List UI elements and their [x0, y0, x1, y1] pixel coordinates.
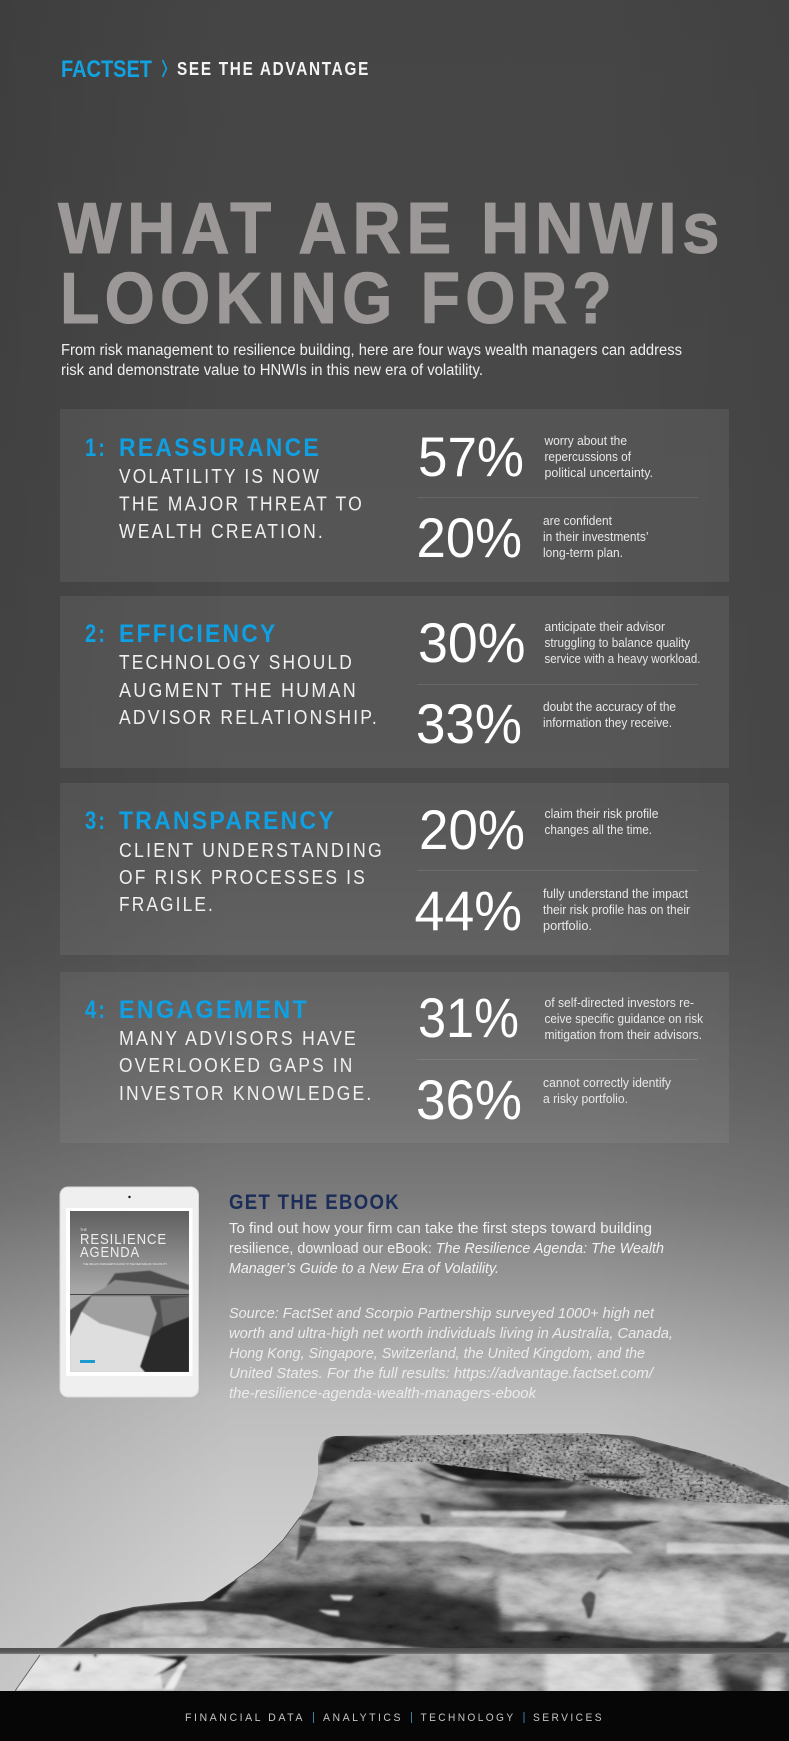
panel 2 description: AUGMENT THE HUMAN [119, 680, 358, 702]
source note: United States. For the full results: https://advantage.factset.com/ [229, 1365, 655, 1382]
stat 44%: 44% [414, 879, 522, 942]
ebook description: Manager’s Guide to a New Era of Volatility. [229, 1260, 499, 1277]
source note: Source: FactSet and Scorpio Partnership surveyed 1000+ high net [229, 1305, 655, 1322]
waterline bar [0, 1648, 789, 1654]
stat 31%: mitigation from their advisors. [544, 1028, 702, 1042]
intro text: risk and demonstrate value to HNWIs in this new era of volatility. [61, 362, 483, 379]
panel 3 heading: 3: [85, 807, 107, 835]
panel 1 heading: 1: [85, 434, 107, 462]
panel 1 description [119, 466, 364, 543]
panel 4 description: OVERLOOKED GAPS IN [119, 1055, 354, 1077]
icon: tablet showing ebook cover: AGENDA [80, 1245, 140, 1261]
stat 20%: claim their risk profile [544, 807, 659, 821]
stat 30%: 30% [418, 611, 526, 674]
stat 31% [418, 986, 704, 1049]
stat 20% [419, 798, 659, 861]
icon: tablet showing ebook cover: THE WEALTH MANAGER’S GUIDE TO THE NEW ERA OF VOLATILITY [83, 1262, 167, 1266]
panel 4 description: INVESTOR KNOWLEDGE. [119, 1083, 374, 1105]
panel 3 description: FRAGILE. [119, 894, 215, 916]
title [58, 189, 725, 339]
stat 31%: ceive specific guidance on risk [544, 1012, 704, 1026]
stat 20%: 20% [419, 798, 525, 861]
stat 33%: information they receive. [543, 716, 672, 730]
stat 57%: repercussions of [544, 450, 631, 464]
stat 20%: 20% [416, 506, 522, 569]
panel 2 description: ADVISOR RELATIONSHIP. [119, 707, 379, 729]
stat 30%: struggling to balance quality [544, 636, 691, 650]
ebook description [229, 1220, 664, 1277]
stat 36%: cannot correctly identify [543, 1076, 672, 1090]
panel 3 heading: TRANSPARENCY [119, 807, 336, 835]
panel 3 description: CLIENT UNDERSTANDING [119, 840, 384, 862]
stat 20%: are confident [543, 514, 612, 528]
footer: FINANCIAL DATA [185, 1712, 305, 1724]
stat 33%: 33% [416, 692, 522, 755]
stat 20%: long-term plan. [543, 546, 623, 560]
panel 1: reassurance [60, 409, 729, 582]
lower body tones [260, 1556, 789, 1648]
panel 1 description: WEALTH CREATION. [119, 521, 325, 543]
title: WHAT ARE HNWIs [58, 189, 725, 269]
heading: get the ebook: GET THE EBOOK [229, 1191, 400, 1214]
panel 2 description: TECHNOLOGY SHOULD [119, 652, 354, 674]
source note: Hong Kong, Singapore, Switzerland, the United Kingdom, and the [229, 1345, 645, 1362]
logo: FactSet see the advantage: SEE THE ADVANTAGE [177, 59, 370, 79]
footer: SERVICES [533, 1712, 604, 1724]
stat 33%: doubt the accuracy of the [543, 700, 676, 714]
stat 36% [416, 1068, 672, 1131]
panel 2: efficiency [60, 596, 729, 768]
stat 44%: fully understand the impact [543, 887, 689, 901]
stat 30%: service with a heavy workload. [544, 652, 700, 666]
left lobe [15, 1579, 500, 1690]
ebook description: To find out how your firm can take the first steps toward building [229, 1220, 652, 1237]
stat 30% [418, 611, 700, 674]
stat 30%: anticipate their advisor [544, 620, 665, 634]
stat 20%: in their investments’ [543, 530, 648, 544]
source note: worth and ultra-high net worth individuals living in Australia, Canada, [229, 1325, 673, 1342]
source note [229, 1305, 673, 1402]
panel 4 description: MANY ADVISORS HAVE [119, 1028, 358, 1050]
title: LOOKING FOR? [60, 259, 617, 339]
intro text: From risk management to resilience building, here are four ways wealth managers can address [61, 342, 682, 359]
iceberg photo illustration [16, 1433, 789, 1691]
crust of the iceberg [344, 1433, 789, 1505]
footer [0, 1691, 789, 1741]
stat 36%: 36% [416, 1068, 522, 1131]
stat 57%: political uncertainty. [544, 466, 653, 480]
intro text [61, 342, 682, 379]
upper iceberg tones [280, 1418, 789, 1572]
panel 2 description [119, 652, 379, 729]
panel 1 heading: REASSURANCE [119, 434, 321, 462]
logo: FactSet see the advantage: FACTSET [61, 56, 152, 83]
panel 3 description [119, 840, 384, 916]
panel 4 heading: 4: [85, 996, 107, 1024]
stat 44% [414, 879, 690, 942]
icon: tablet showing ebook cover: THE [80, 1228, 88, 1232]
panel 2 heading: EFFICIENCY [119, 620, 278, 648]
panel 1 description: THE MAJOR THREAT TO [119, 494, 364, 516]
ebook description: resilience, download our eBook: The Resilience Agenda: The Wealth [229, 1240, 664, 1257]
stat 57%: 57% [418, 425, 524, 488]
stat 31%: of self-directed investors re- [544, 996, 694, 1010]
stat 57% [418, 425, 653, 488]
soft texture [0, 1430, 789, 1692]
logo: FactSet see the advantage [61, 56, 370, 83]
panel 3: transparency [60, 783, 729, 955]
source note: the-resilience-agenda-wealth-managers-ebook [229, 1385, 537, 1402]
panel 4 description [119, 1028, 374, 1105]
stat 44%: their risk profile has on their [543, 903, 690, 917]
panel 1 description: VOLATILITY IS NOW [119, 466, 321, 488]
stat 57%: worry about the [544, 434, 627, 448]
stat 44%: portfolio. [543, 919, 592, 933]
panel 4 heading: ENGAGEMENT [119, 996, 309, 1024]
footer: ANALYTICS [323, 1712, 403, 1724]
stat 20% [416, 506, 648, 569]
icon: tablet showing ebook cover [60, 1187, 198, 1397]
panel 4: engagement [60, 972, 729, 1143]
panel 3 description: OF RISK PROCESSES IS [119, 867, 367, 889]
below-waterline tones [16, 1646, 789, 1691]
iceberg outline edge [15, 1517, 300, 1691]
footer: TECHNOLOGY [420, 1712, 516, 1724]
stat 31%: 31% [418, 986, 519, 1049]
stat 20%: changes all the time. [544, 823, 652, 837]
panel 2 heading: 2: [85, 620, 107, 648]
stat 33% [416, 692, 676, 755]
icon: tablet showing ebook cover: RESILIENCE [80, 1232, 167, 1248]
stat 36%: a risky portfolio. [543, 1092, 628, 1106]
